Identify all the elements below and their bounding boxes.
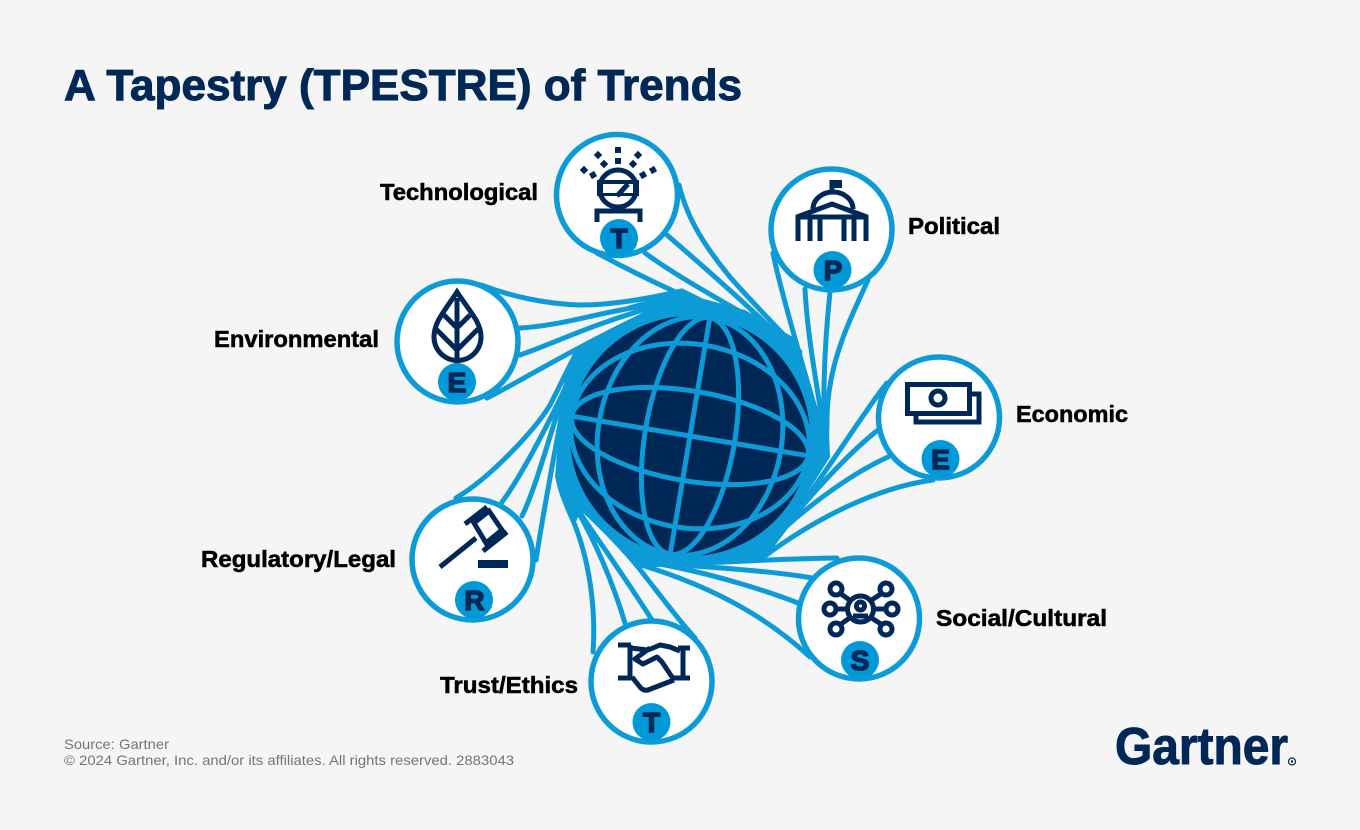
strands: political	[773, 253, 868, 450]
panel: trust/ethics	[591, 621, 712, 742]
badge letter T: T	[643, 707, 660, 738]
badge letter E: E	[448, 367, 466, 398]
badge letter P: P	[824, 255, 842, 286]
label: Technological: Technological	[380, 179, 538, 205]
badge letter T: T	[610, 223, 628, 254]
panel: political	[771, 169, 892, 290]
icon: social network	[824, 583, 898, 635]
panel: social/cultural	[798, 558, 920, 679]
icon: capitol building	[796, 180, 868, 241]
icon: handshake	[618, 645, 690, 690]
badge letter S: S	[851, 645, 869, 676]
strands: social/cultural	[638, 558, 837, 657]
icon: technology lightbulb	[580, 147, 657, 222]
label: Trust/Ethics: Trust/Ethics	[440, 672, 578, 698]
strands: economic	[755, 383, 933, 560]
icon: leaf	[434, 292, 481, 364]
blue swirl ring around globe	[555, 292, 830, 568]
strands: technological	[597, 185, 800, 352]
icon: banknotes	[908, 384, 979, 422]
strands connecting trend circles to the globe	[456, 185, 933, 657]
panel: technological	[556, 134, 678, 257]
title: A Tapestry (TPESTRE) of Trends	[64, 61, 742, 110]
strands: environmental	[481, 285, 700, 398]
label: Regulatory/Legal: Regulatory/Legal	[201, 546, 396, 572]
label: Social/Cultural: Social/Cultural	[936, 605, 1107, 631]
label: Economic: Economic	[1016, 401, 1128, 427]
source note	[64, 736, 514, 768]
label: Political: Political	[908, 213, 1000, 239]
label: Environmental: Environmental	[214, 326, 379, 352]
panel: economic	[878, 357, 1000, 478]
badge letter R: R	[464, 585, 485, 616]
source note: Source: Gartner	[64, 736, 169, 752]
strands: trust/ethics	[558, 478, 695, 652]
source note: © 2024 Gartner, Inc. and/or its affiliates. All rights reserved. 2883043	[64, 752, 514, 768]
Gartner logo: Gartner	[1115, 718, 1288, 776]
panel: regulatory/legal	[412, 499, 533, 620]
panel: environmental	[397, 281, 518, 402]
icon: gavel	[440, 507, 508, 568]
badge letter E: E	[931, 444, 950, 475]
globe	[552, 298, 828, 574]
strands: regulatory/legal	[456, 350, 578, 560]
